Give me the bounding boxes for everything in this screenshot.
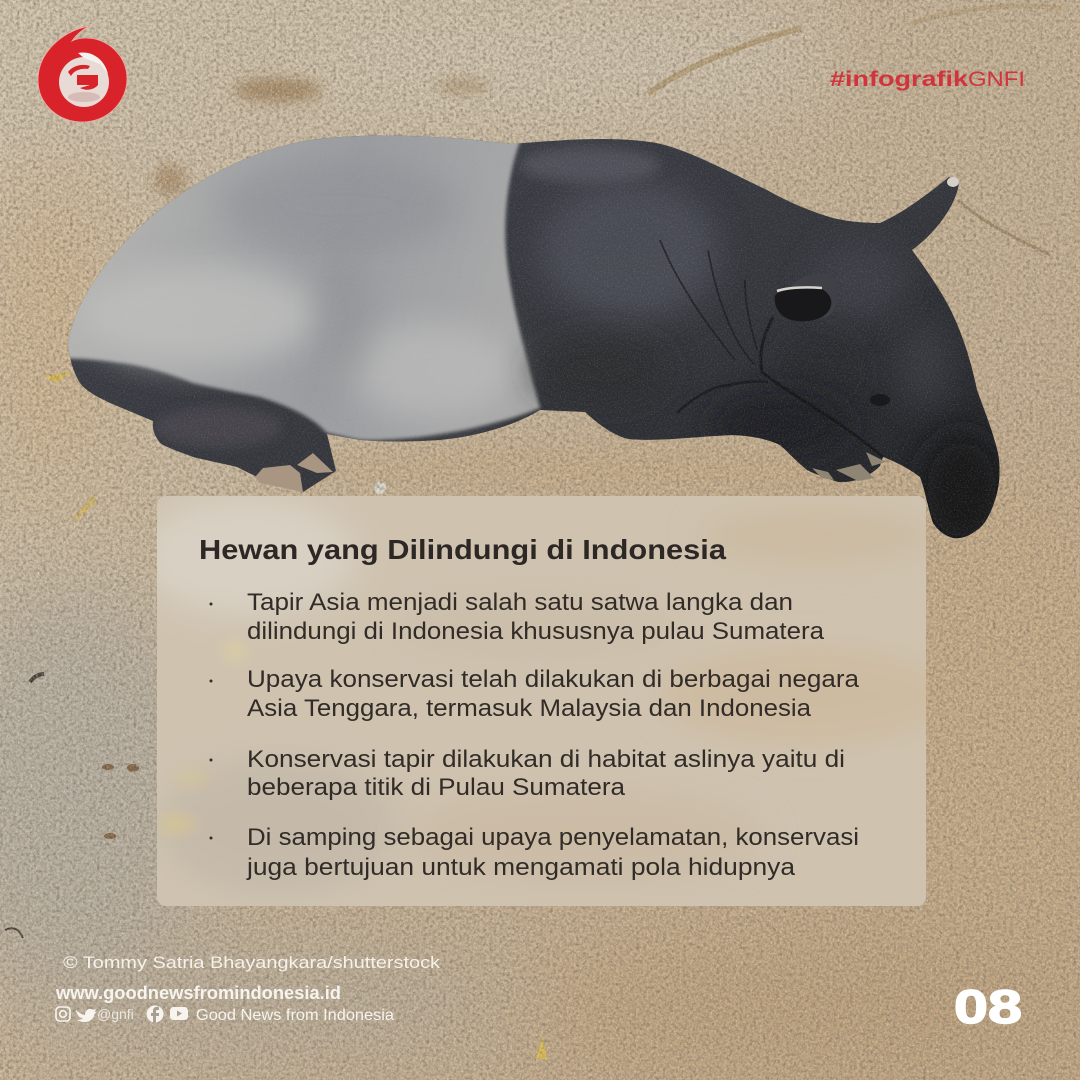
icon: instagram (56, 1007, 70, 1021)
photo credit: © Tommy Satria Bhayangkara/shutterstock (63, 953, 441, 972)
bullet 1: Tapir Asia menjadi salah satu satwa langka dan (247, 589, 793, 616)
bullet 1 (210, 589, 825, 645)
tapir: back hoof (255, 453, 333, 492)
bullet 4 (210, 824, 859, 881)
tapir: front hoof (812, 452, 886, 481)
bullet 1: dilindungi di Indonesia khususnya pulau Sumatera (247, 618, 825, 645)
bullet 3 (210, 746, 845, 801)
account name: Good News from Indonesia (196, 1007, 394, 1024)
bullet 2: Asia Tenggara, termasuk Malaysia dan Indonesia (247, 695, 812, 722)
tapir: ear (775, 273, 838, 321)
tapir: thigh (154, 407, 282, 447)
panel: translucent frosted text card (137, 496, 957, 906)
bullet 2: Upaya konservasi telah dilakukan di berbagai negara (247, 666, 860, 693)
heading: Hewan yang Dilindungi di Indonesia (199, 534, 726, 565)
page number: 08 (954, 980, 1022, 1033)
social media row (56, 1006, 394, 1024)
icon: facebook (146, 1006, 164, 1023)
handle: @gnfi (97, 1006, 134, 1022)
bullet 2 (210, 666, 860, 722)
bullet 3: beberapa titik di Pulau Sumatera (247, 774, 626, 801)
tapir: pale grey saddle and rump (68, 136, 542, 442)
tapir photo: resting Malayan tapir (68, 136, 1000, 538)
bullet 4: Di samping sebagai upaya penyelamatan, konservasi (247, 824, 859, 851)
tapir: upper ear tip (947, 177, 959, 187)
bullet 4: juga bertujuan untuk mengamati pola hidupnya (246, 854, 796, 881)
tapir: neck and jaw folds (761, 317, 883, 457)
icon: twitter (76, 1009, 96, 1022)
hashtag label (830, 68, 1025, 91)
icon: youtube (170, 1007, 188, 1020)
hashtag label: #infografik (830, 68, 968, 91)
website url: www.goodnewsfromindonesia.id (55, 983, 341, 1003)
hashtag label: GNFI (968, 68, 1025, 91)
tapir: fur grain (60, 130, 1010, 550)
tapir: dark front body and head (60, 130, 1010, 550)
tapir: eye (870, 394, 890, 406)
bullet 3: Konservasi tapir dilakukan di habitat aslinya yaitu di (247, 746, 845, 773)
icon: GNFI logo (38, 26, 127, 122)
